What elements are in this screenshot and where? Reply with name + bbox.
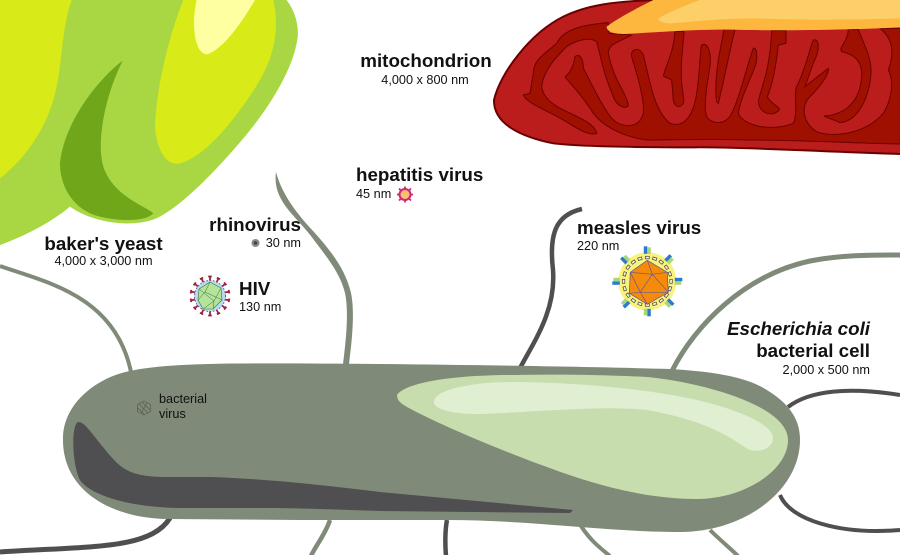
cell interior highlight <box>434 382 773 451</box>
label: hepatitis virus <box>356 164 483 201</box>
icon: measles virus <box>612 246 682 316</box>
label: HIV: HIV <box>239 278 271 299</box>
label: measles virus: measles virus <box>577 217 701 238</box>
label: measles virus: 220 nm <box>577 239 619 253</box>
bacterial flagella <box>0 172 900 555</box>
label: HIV: 130 nm <box>239 300 281 314</box>
panel: baker's yeast cell <box>0 0 298 245</box>
label: mitochondrion: mitochondrion <box>360 50 492 71</box>
label: HIV <box>239 278 281 314</box>
icon: hepatitis virus <box>397 186 413 202</box>
panel: E. coli bacterial cell body <box>63 363 800 532</box>
icon: bacterial virus <box>138 401 150 415</box>
label: rhinovirus: rhinovirus <box>209 214 301 235</box>
label: baker's yeast: baker's yeast <box>44 233 163 254</box>
label: mitochondrion <box>360 50 492 87</box>
label: measles virus <box>577 217 701 253</box>
panel: mitochondrion organelle <box>494 0 900 154</box>
label: rhinovirus: 30 nm <box>266 236 301 250</box>
label: bacterial virus: virus <box>159 407 186 421</box>
label: Escherichia coli bacterial cell: 2,000 x 500 nm <box>783 363 870 377</box>
cell interior dark region <box>73 422 573 513</box>
label: Escherichia coli bacterial cell <box>727 318 871 377</box>
label: bacterial virus: bacterial <box>159 392 207 406</box>
label: baker's yeast: 4,000 x 3,000 nm <box>54 254 153 268</box>
label: hepatitis virus: 45 nm <box>356 187 391 201</box>
label: hepatitis virus: hepatitis virus <box>356 164 483 185</box>
icon: HIV virus <box>191 276 229 316</box>
cell interior light region <box>397 375 788 499</box>
label: Escherichia coli bacterial cell: Escherichia coli <box>727 318 871 339</box>
icon: rhinovirus <box>252 239 260 247</box>
label: Escherichia coli bacterial cell: bacterial cell <box>756 340 870 361</box>
label: baker's yeast <box>44 233 163 268</box>
label: mitochondrion: 4,000 x 800 nm <box>381 73 469 87</box>
label: rhinovirus <box>209 214 301 250</box>
